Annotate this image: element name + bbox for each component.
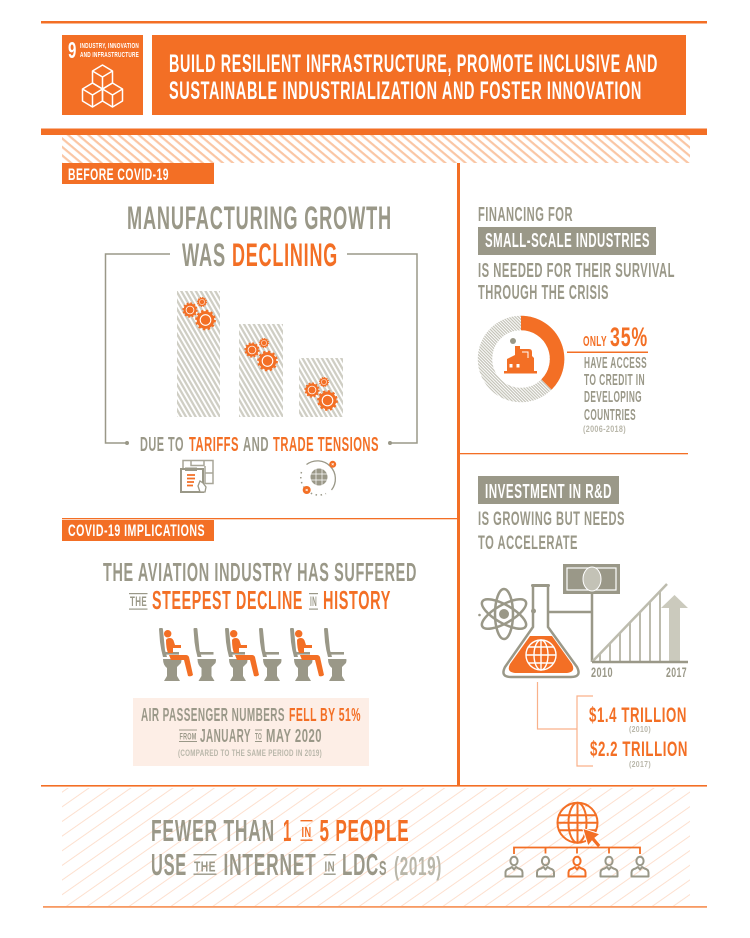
callout: only 35 percent: TO CREDIT IN: [584, 372, 645, 389]
heading: fewer than 1 in 5 people: FEWER THAN: [151, 813, 275, 848]
heading: fewer than 1 in 5 people: (2019): [394, 851, 442, 881]
panel: investment in r&d: [478, 476, 688, 769]
heading: aviation: HISTORY: [323, 585, 391, 615]
callout: only 35 percent: [567, 322, 648, 434]
callout: air passenger numbers: TO: [255, 732, 262, 742]
heading: manufacturing growth: [127, 200, 392, 273]
callout: r&d trillions: $2.2 TRILLION: [590, 737, 688, 761]
heading: fewer than 1 in 5 people: INTERNET: [224, 847, 316, 882]
callout: r&d trillions: $1.4 TRILLION: [589, 703, 687, 727]
heading: investment in r&d: [478, 476, 625, 554]
callout: only 35 percent: COUNTRIES: [584, 407, 636, 424]
icon: banknote: [547, 564, 620, 662]
chart: growth 2010 to 2017: 2010: [591, 664, 613, 680]
heading: manufacturing growth: DECLINING: [232, 237, 338, 273]
icon: flask with globe: [503, 584, 579, 677]
SDG 9 badge: INDUSTRY, INNOVATION: [80, 41, 139, 50]
callout: air passenger numbers: MAY 2020: [266, 726, 322, 746]
heading: fewer than 1 in 5 people: USE: [151, 847, 187, 882]
heading: investment in r&d: IS GROWING BUT NEEDS: [478, 508, 625, 530]
callout: air passenger numbers: [133, 698, 369, 766]
heading: aviation: THE AVIATION INDUSTRY HAS SUFFERED: [103, 557, 417, 587]
connector bracket: [538, 682, 593, 766]
caption: due to tariffs and trade tensions: AND: [243, 434, 269, 456]
heading: aviation: [103, 557, 417, 615]
callout: only 35 percent: HAVE ACCESS: [584, 355, 647, 372]
icon: clipboard and boxes: [181, 460, 213, 492]
callout: only 35 percent: (2006-2018): [583, 424, 626, 434]
heading: aviation: THE: [130, 593, 147, 609]
panel: covid-19 implications: [62, 518, 457, 766]
icon: aircraft seats: [159, 628, 346, 681]
caption: due to tariffs and trade tensions: [140, 434, 379, 456]
panel: financing: [478, 204, 675, 434]
heading: fewer than 1 in 5 people: 5 PEOPLE: [320, 813, 410, 848]
top rule: [41, 21, 707, 24]
heading: fewer than 1 in 5 people: [151, 813, 442, 882]
caption: due to tariffs and trade tensions: TRADE TENSIONS: [273, 434, 379, 456]
callout: air passenger numbers: AIR PASSENGER NUMBERS: [141, 705, 285, 725]
icon: globe with trade tensions: [301, 461, 336, 495]
callout: only 35 percent: 35%: [610, 322, 648, 352]
callout: air passenger numbers: FELL BY 51%: [289, 705, 361, 725]
bracket frame: [106, 254, 417, 445]
SDG 9 badge: 9: [68, 37, 77, 63]
section label: covid-19 implications: COVID-19 IMPLICATIONS: [68, 522, 205, 540]
heading: manufacturing growth: WAS: [182, 237, 226, 273]
callout: air passenger numbers: (COMPARED TO THE SAME PERIOD IN 2019): [178, 748, 322, 759]
heading: fewer than 1 in 5 people: LDC: [342, 847, 379, 882]
caption: due to tariffs and trade tensions: DUE TO: [140, 434, 184, 456]
callout: r&d trillions: (2010): [629, 725, 651, 734]
icon: factory: [504, 338, 537, 374]
callout: r&d trillions: [589, 703, 688, 769]
callout: air passenger numbers: FROM: [180, 732, 196, 742]
heading: financing for small-scale industries: THROUGH THE CRISIS: [478, 282, 609, 304]
callout: only 35 percent: DEVELOPING: [584, 389, 642, 406]
chart: growth 2010 to 2017: 2017: [666, 664, 687, 680]
heading: fewer than 1 in 5 people: S: [379, 858, 387, 880]
heading: fewer than 1 in 5 people: 1: [283, 813, 292, 848]
callout: r&d trillions: (2017): [629, 760, 651, 769]
callout: air passenger numbers: JANUARY: [200, 726, 251, 746]
heading: fewer than 1 in 5 people: THE: [194, 858, 216, 876]
callout: only 35 percent: ONLY: [583, 333, 607, 350]
thick divider: [41, 128, 707, 135]
panel: internet access: [41, 785, 707, 908]
heading: aviation: IN: [310, 593, 317, 609]
title banner: [152, 35, 686, 115]
heading: manufacturing growth: MANUFACTURING GROWTH: [127, 200, 392, 236]
icon: atom: [478, 589, 530, 639]
icon: globe with cursor: [558, 803, 601, 848]
section label: before covid-19: BEFORE COVID-19: [68, 165, 169, 184]
SDG 9 badge: [62, 35, 143, 115]
heading: fewer than 1 in 5 people: IN: [302, 824, 312, 841]
donut chart: 35 percent: [485, 323, 557, 395]
heading: financing for small-scale industries: [478, 204, 675, 304]
SDG 9 badge: AND INFRASTRUCTURE: [80, 50, 139, 59]
section label: covid-19 implications: [62, 520, 214, 541]
chart: growth 2010 to 2017: [591, 584, 688, 680]
vertical panel divider: [457, 163, 460, 786]
bar chart with gears: [177, 291, 343, 417]
heading: financing for small-scale industries: FINANCING FOR: [478, 204, 573, 226]
caption: due to tariffs and trade tensions: TARIFFS: [189, 434, 239, 456]
network of people: [506, 848, 648, 876]
heading: aviation: STEEPEST DECLINE: [152, 585, 303, 615]
panel: before covid-19: [62, 163, 417, 495]
heading: fewer than 1 in 5 people: IN: [324, 858, 335, 876]
heading: investment in r&d: TO ACCELERATE: [478, 532, 578, 554]
heading: investment in r&d: INVESTMENT IN R&D: [485, 481, 612, 503]
